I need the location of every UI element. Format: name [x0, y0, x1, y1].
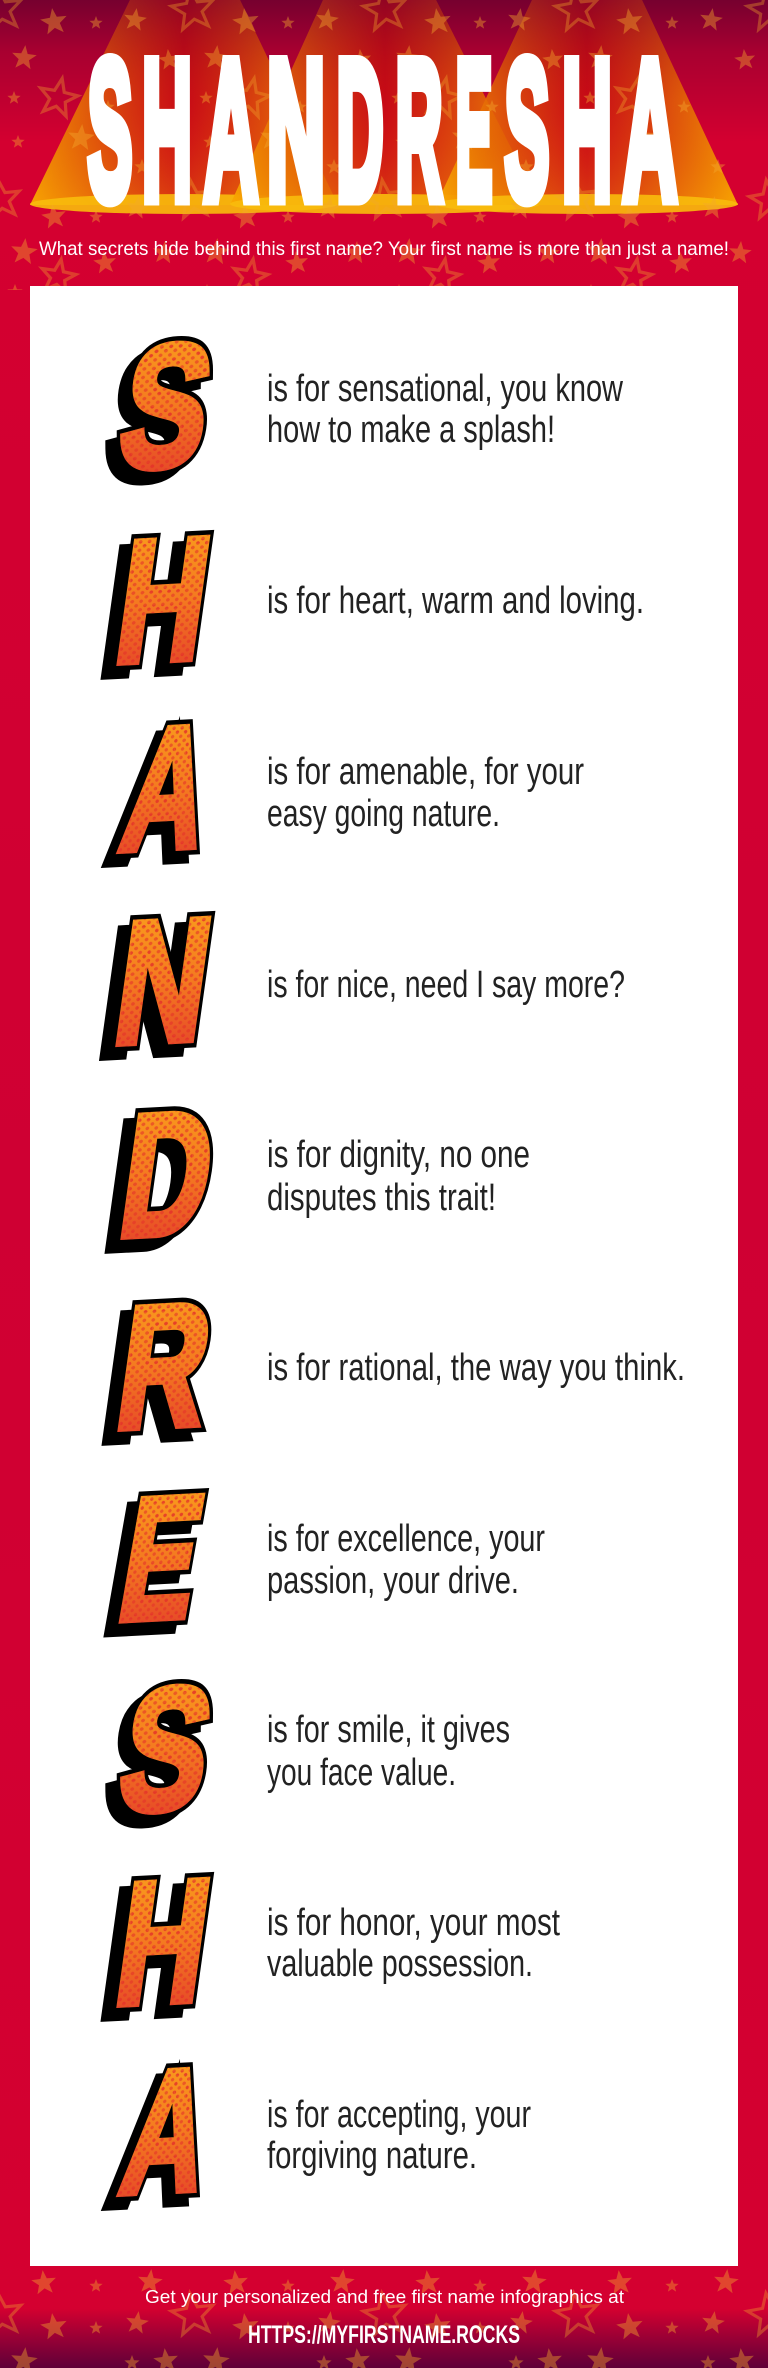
footer url: HTTPS://MYFIRSTNAME.ROCKS — [248, 2321, 520, 2349]
icon: comic letter D: D — [98, 1084, 212, 1283]
title: N — [267, 20, 325, 240]
icon: comic letter N: N — [105, 883, 222, 1081]
title: A — [204, 20, 258, 240]
text: A line: easy going nature. — [267, 793, 500, 835]
row: E excellence — [96, 1460, 545, 1667]
title: A — [623, 20, 677, 240]
title: H — [562, 20, 612, 241]
icon: comic letter H: H — [106, 501, 220, 699]
icon: comic letter S: S — [109, 1650, 224, 1849]
icon: comic letter S: S — [97, 316, 213, 515]
row: N nice — [92, 883, 625, 1091]
text: N line: is for nice, need I say more? — [267, 964, 625, 1006]
icon: comic letter N: N — [92, 893, 209, 1091]
icon: comic letter H: H — [106, 1843, 220, 2041]
icon: comic letter A: A — [111, 2033, 224, 2231]
text: D line: is for dignity, no one — [267, 1134, 530, 1176]
text: H honor line: is for honor, your most — [267, 1902, 560, 1944]
row: H heart — [94, 501, 644, 709]
title — [88, 20, 677, 241]
icon: comic letter S: S — [109, 307, 224, 506]
row: A amenable — [100, 690, 584, 897]
title: H — [142, 20, 192, 241]
icon: comic letter N: N — [105, 883, 222, 1081]
text: H honor line: valuable possession. — [267, 1943, 533, 1985]
text: E line: is for excellence, your — [267, 1518, 545, 1560]
icon: comic letter E: E — [96, 1470, 203, 1667]
icon: comic letter D: D — [110, 1075, 224, 1273]
icon: comic letter S: S — [109, 1650, 224, 1849]
icon: comic letter H: H — [106, 1843, 220, 2041]
icon: comic letter A: A — [111, 690, 224, 888]
icon: comic letter S: S — [109, 1650, 224, 1849]
icon: comic letter R: R — [107, 1267, 221, 1465]
star pattern bottom — [0, 2268, 768, 2368]
icon: comic letter R: R — [107, 1267, 221, 1465]
footer text: Get your personalized and free first name infographics at — [145, 2286, 624, 2307]
icon: comic letter H: H — [106, 1843, 220, 2041]
subtitle: What secrets hide behind this first name? Your first name is more than just a name! — [39, 238, 729, 260]
text: D line: disputes this trait! — [267, 1177, 496, 1219]
icon: comic letter A: A — [100, 2042, 214, 2240]
text: S line: how to make a splash! — [267, 409, 555, 451]
icon: comic letter E: E — [108, 1460, 215, 1658]
icon: comic letter H: H — [94, 510, 208, 709]
title: D — [337, 21, 383, 241]
row: S sensational — [97, 307, 623, 515]
text: A accepting line: forgiving nature. — [267, 2135, 477, 2177]
icon: comic letter A: A — [111, 690, 224, 888]
title: R — [396, 21, 442, 241]
row: A accepting — [100, 2033, 531, 2240]
icon: comic letter H: H — [106, 501, 220, 699]
icon: comic letter A: A — [111, 2033, 224, 2231]
icon: comic letter A: A — [111, 2033, 224, 2231]
icon: comic letter A: A — [111, 690, 224, 888]
icon: comic letter N: N — [105, 883, 222, 1081]
title: S — [88, 21, 132, 241]
icon: comic letter H: H — [106, 501, 220, 699]
icon: comic letter S: S — [109, 307, 224, 506]
spotlight cone right — [436, 0, 738, 214]
star pattern top — [0, 0, 768, 290]
text: E line: passion, your drive. — [267, 1560, 519, 1602]
text: S line: is for sensational, you know — [267, 368, 623, 410]
spotlights — [30, 0, 738, 214]
icon: comic letter E: E — [108, 1460, 215, 1658]
spotlight cone middle — [230, 0, 540, 214]
row: H honor — [94, 1843, 560, 2051]
row: R rational — [95, 1267, 685, 1475]
text: S smile line: is for smile, it gives — [267, 1709, 510, 1751]
row: D dignity — [98, 1075, 530, 1283]
icon: comic letter D: D — [110, 1075, 224, 1273]
icon: comic letter H: H — [94, 1852, 208, 2051]
spotlight cone left — [30, 0, 338, 214]
icon: comic letter R: R — [107, 1267, 221, 1465]
icon: comic letter S: S — [97, 1659, 213, 1858]
icon: comic letter E: E — [108, 1460, 215, 1658]
icon: comic letter A: A — [100, 699, 214, 897]
icon: comic letter R: R — [95, 1276, 209, 1475]
text: H line: is for heart, warm and loving. — [267, 580, 644, 622]
panel: white card — [30, 286, 738, 2266]
title: S — [505, 21, 549, 241]
icon: comic letter D: D — [110, 1075, 224, 1273]
title: E — [456, 20, 492, 240]
icon: comic letter S: S — [109, 307, 224, 506]
text: A line: is for amenable, for your — [267, 751, 584, 793]
row: S smile — [97, 1650, 510, 1858]
text: A accepting line: is for accepting, your — [267, 2094, 531, 2136]
text: S smile line: you face value. — [267, 1752, 456, 1794]
